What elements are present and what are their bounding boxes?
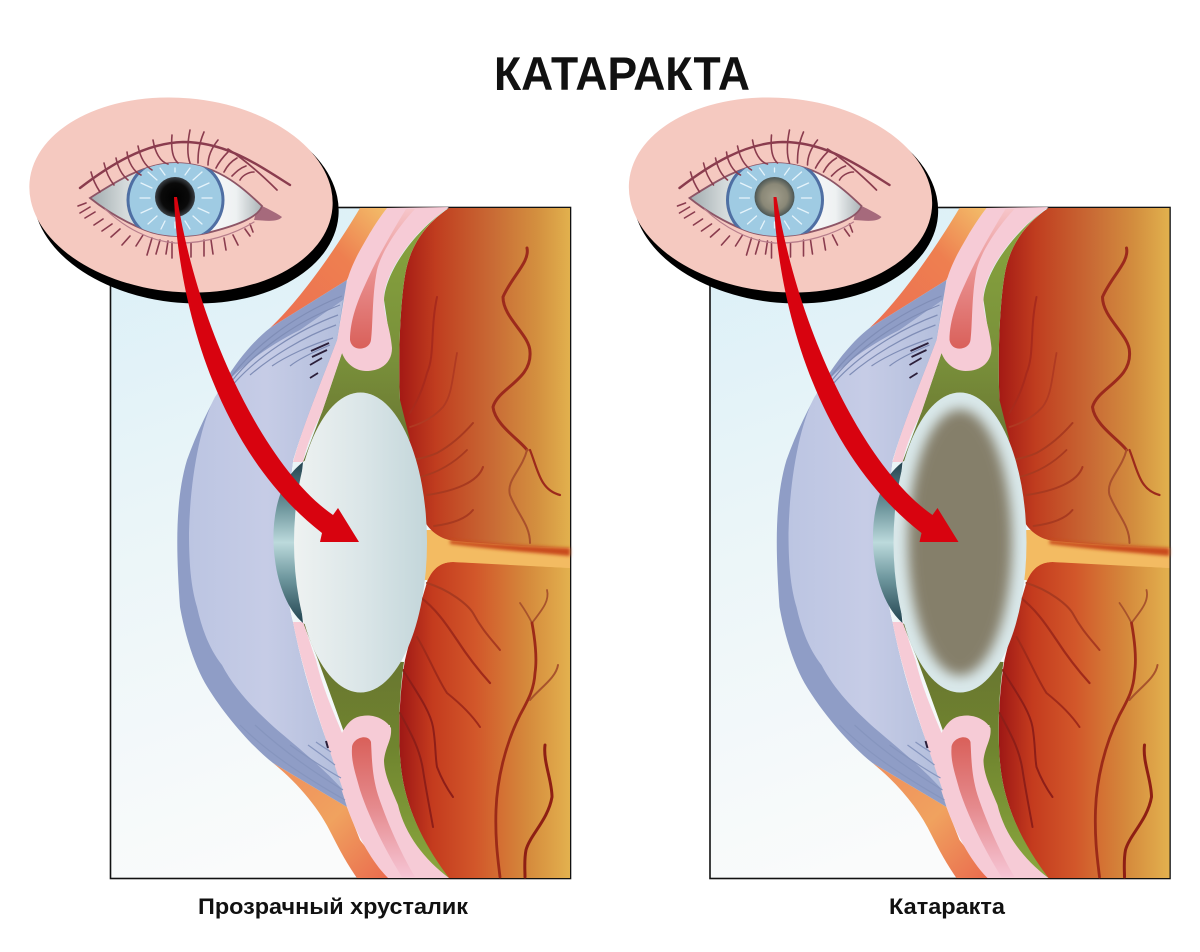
iris <box>728 160 822 240</box>
iris cross-section <box>873 462 902 623</box>
red channel upper <box>950 209 1014 349</box>
panel background frame <box>110 208 570 878</box>
red channel lower <box>352 737 415 877</box>
panel background frame <box>710 208 1170 878</box>
retina and choroid <box>994 208 1170 878</box>
cornea striations upper <box>818 296 942 395</box>
pupil <box>155 177 195 217</box>
clouded lens <box>894 392 1026 692</box>
caruncle <box>254 204 282 221</box>
clouded pupil <box>754 177 794 217</box>
red arrow <box>774 197 958 542</box>
green vitreous border <box>902 207 1048 878</box>
sclera <box>690 163 862 236</box>
green vitreous border <box>303 207 449 878</box>
cornea striations lower <box>240 725 345 800</box>
dark fibres <box>910 343 928 378</box>
clear lens <box>294 392 427 692</box>
eye oval <box>21 85 341 305</box>
cornea striations upper <box>219 296 342 395</box>
eye oval shadow <box>624 90 947 316</box>
dark fibres <box>310 343 329 378</box>
muscle wedges <box>270 208 390 878</box>
caruncle <box>854 204 882 221</box>
caption: cataract: Катаракта <box>889 894 1006 919</box>
cornea striations lower <box>840 725 944 800</box>
red channel upper <box>350 209 415 349</box>
sclera <box>90 163 262 236</box>
eyelid crease and lashes <box>78 130 290 258</box>
iris cross-section <box>273 462 303 623</box>
blood vessels <box>400 248 560 877</box>
cornea <box>777 280 946 807</box>
panel: clear lens <box>21 85 571 878</box>
title: КАТАРАКТА <box>494 47 750 100</box>
retina and choroid <box>395 208 570 878</box>
eye <box>90 160 282 240</box>
pink sclera band <box>892 207 1048 878</box>
red arrow <box>174 197 359 542</box>
eyelid crease and lashes <box>678 130 890 258</box>
blood vessels <box>1000 248 1160 877</box>
eye <box>690 160 882 240</box>
cornea <box>177 280 347 807</box>
eye oval shadow <box>25 90 347 316</box>
panel: cataract <box>621 85 1170 878</box>
caption: clear lens: Прозрачный хрусталик <box>198 894 469 919</box>
iris <box>128 160 223 240</box>
muscle wedges <box>870 208 990 878</box>
red channel lower <box>951 737 1014 877</box>
pink sclera band <box>293 207 449 878</box>
eye oval <box>621 85 940 305</box>
